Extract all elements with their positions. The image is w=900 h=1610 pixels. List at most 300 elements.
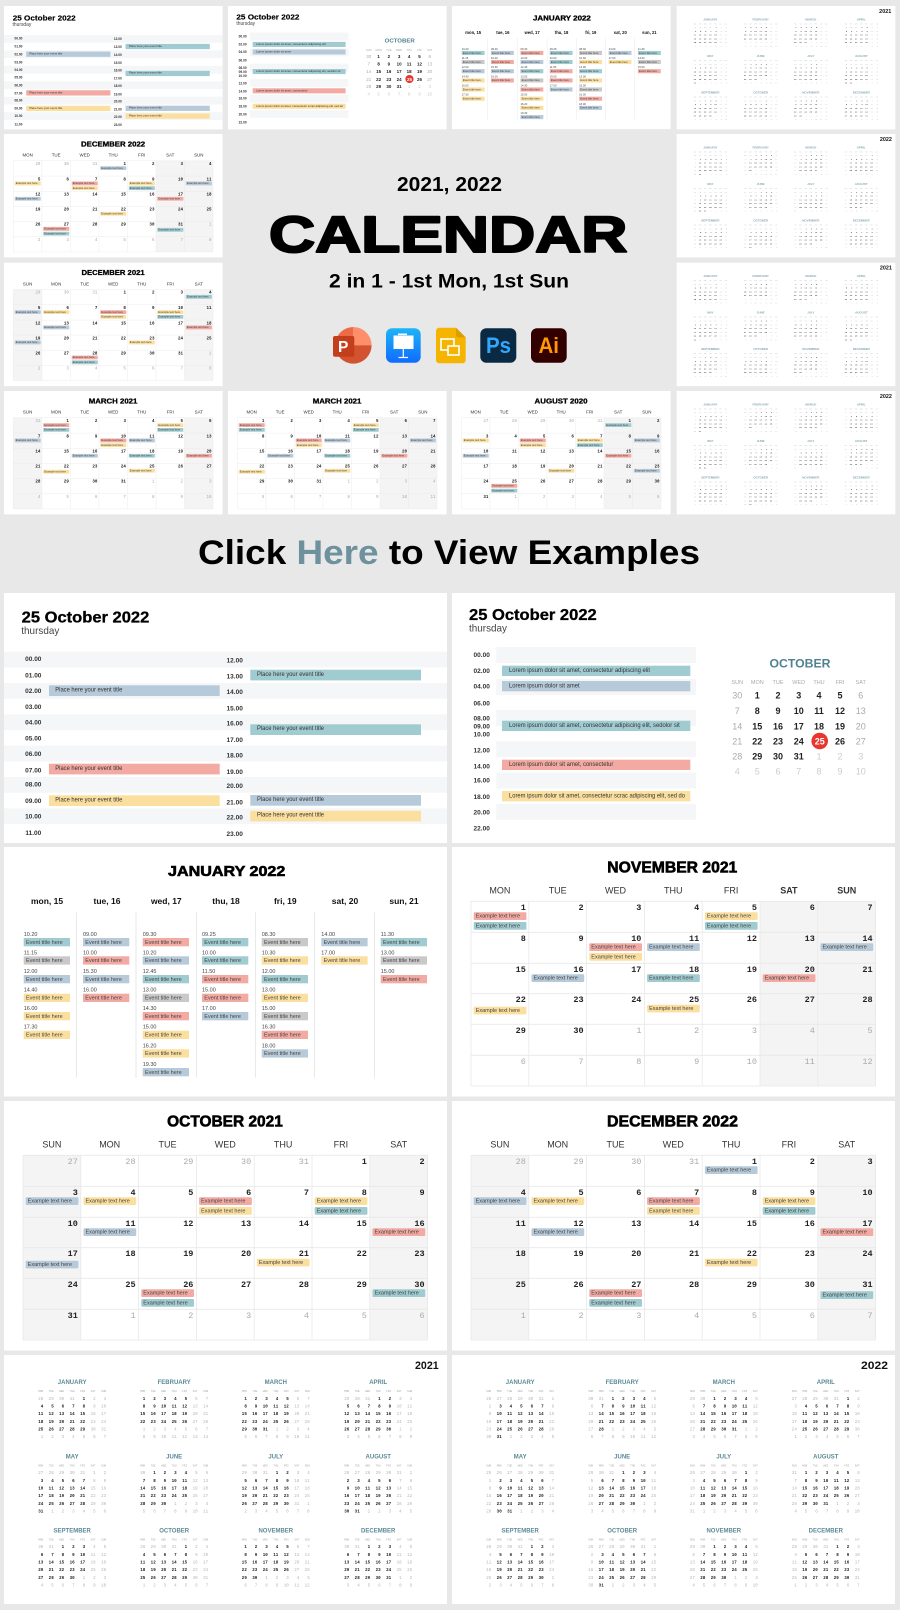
column: monday: Event title here <box>26 977 63 983</box>
month: February: FEBRUARY <box>158 1380 191 1386</box>
thumbnail: December 2022 month, Monday first: SAT <box>166 153 175 158</box>
event bars: Lorem ipsum dolor sit amet, consectetur adipiscing elit <box>509 668 650 674</box>
mini calendar: 8 <box>816 767 822 777</box>
mini calendar: 9 <box>775 706 781 716</box>
thumbnail: March 2021 month, Monday first: Example text here <box>268 453 291 457</box>
events: Example text here <box>143 1300 188 1306</box>
mini calendar: MON <box>751 680 764 686</box>
thumbnail: year 2021: 2021 <box>879 9 891 15</box>
month: September: 2 3 4 5 6 7 8 <box>486 1584 555 1588</box>
column: wednesday: 13.00 <box>143 988 156 994</box>
thumbnail: December 2021 month: Example text here <box>158 310 181 314</box>
event bars: Place here your event title <box>55 766 123 772</box>
month: June: 7 8 9 10 11 12 13 <box>140 1480 209 1484</box>
mini calendar: 4 <box>816 691 822 701</box>
event bars: Lorem ipsum dolor sit amet, consectetur scrac adipiscing elit, sed do <box>509 794 686 800</box>
thumbnail: December 2022 month, Monday first: FRI <box>138 153 145 158</box>
events: Example text here <box>476 914 520 920</box>
weekday headings: mon, 15 <box>31 896 63 906</box>
mini calendar: 21 <box>732 737 742 747</box>
weekday: thursday <box>469 623 508 635</box>
month: September: 13 14 15 16 17 18 19 <box>38 1561 107 1565</box>
month: May: 8 9 10 11 12 13 14 <box>486 1487 555 1491</box>
weekday headings: sun, 21 <box>389 896 419 906</box>
thumbnail: March 2021 month, Sunday first <box>4 391 223 514</box>
year label: 2022 <box>861 1360 888 1372</box>
month: June: JUNE <box>614 1454 630 1460</box>
column: friday: Event title here <box>264 1032 301 1038</box>
title: DECEMBER 2022 <box>607 1114 738 1131</box>
weekday headings: WED <box>605 886 626 896</box>
events: Example text here <box>649 1006 693 1012</box>
weekday headings: MON <box>99 1139 120 1149</box>
month: July: 17 18 19 20 21 22 23 <box>690 1495 758 1499</box>
day numbers: 1 2 3 4 5 6 7 <box>516 903 873 913</box>
month: August: 26 27 28 29 30 31 1 <box>344 1472 413 1476</box>
thumbnail: March 2021 month, Monday first: MON <box>246 410 257 415</box>
month: May: 27 28 29 30 31 1 2 <box>38 1472 107 1476</box>
thumbnail: March 2021 month, Sunday first: MARCH 2021 <box>89 397 138 406</box>
month: November: 20 21 22 23 24 25 26 <box>690 1569 758 1573</box>
month: October: 4 5 6 7 8 9 10 <box>140 1554 209 1558</box>
month: November: SUN MON TUE WED THU FRI SAT <box>690 1539 758 1542</box>
events: Example text here <box>591 1291 636 1297</box>
column: tuesday: Event title here <box>85 996 122 1002</box>
panel: November 2021 month <box>452 847 895 1096</box>
column: monday <box>24 932 70 1039</box>
mini calendar: 10 <box>856 767 866 777</box>
thumbnail: December 2021 month: SAT <box>195 281 203 286</box>
thumbnail: August 2020 month: FRI <box>586 410 593 415</box>
month: July: JULY <box>268 1454 283 1460</box>
month: June: 3 4 5 6 7 8 9 <box>588 1510 657 1514</box>
thumbnail: March 2021 month, Monday first <box>228 391 447 514</box>
column: thursday: Event title here <box>204 958 241 964</box>
events: Example text here <box>765 976 809 982</box>
panel: daily schedule full day <box>4 593 447 843</box>
events: Example text here <box>591 954 636 960</box>
thumbnail: December 2021 month: Example text here <box>16 310 38 314</box>
mini calendar: TUE <box>772 680 784 686</box>
events: Example text here <box>591 1300 636 1306</box>
event bars: Place here your event title <box>257 726 325 732</box>
thumbnail: August 2020 month: 31 1 2 3 4 5 6 <box>483 496 660 500</box>
month: February: 15 16 17 18 19 20 21 <box>140 1413 209 1417</box>
month: July: 10 11 12 13 14 15 16 <box>690 1487 758 1491</box>
month: April: 1 2 3 4 5 6 7 <box>792 1436 860 1440</box>
month: May: 1 2 3 4 5 6 7 <box>486 1480 555 1484</box>
events: Example text here <box>707 1168 751 1174</box>
thumbnail: August 2020 month <box>452 391 671 514</box>
column: saturday: 17.00 <box>321 950 335 956</box>
mini calendar: 19 <box>835 721 845 731</box>
mini calendar: 5 <box>837 691 843 701</box>
mini calendar: 22 <box>752 737 762 747</box>
thumbnail: December 2022 month, Monday first: Example text here <box>16 181 38 185</box>
thumbnail: March 2021 month, Monday first: Example text here <box>411 438 433 442</box>
icon: PowerPoint <box>333 327 372 364</box>
month: October: 1 2 3 4 5 6 7 <box>140 1584 209 1588</box>
thumbnail: March 2021 month, Monday first: Example text here <box>354 428 376 432</box>
month: April: 12 13 14 15 16 17 18 <box>344 1413 413 1417</box>
month: February: SUN MON TUE WED THU FRI SAT <box>588 1390 657 1393</box>
day numbers: 22 23 24 25 26 27 28 <box>516 995 873 1005</box>
month: December: 13 14 15 16 17 18 19 <box>344 1561 413 1565</box>
thumbnail: March 2021 month, Sunday first: Example text here <box>101 438 124 442</box>
day numbers: 24 25 26 27 28 29 30 <box>68 1280 425 1290</box>
month: August: 2 3 4 5 6 7 8 <box>344 1480 413 1484</box>
column: monday: 17.30 <box>24 1025 37 1031</box>
mini calendar: 2 <box>837 751 843 761</box>
month: April: 29 30 31 1 2 3 4 <box>344 1398 413 1402</box>
month: September: 28 29 30 31 1 2 3 <box>486 1546 555 1550</box>
thumbnail: August 2020 month: Example text here <box>492 484 515 488</box>
weekday headings: thu, 18 <box>212 896 240 906</box>
events: Example text here <box>765 1208 809 1214</box>
column: monday: 10.20 <box>24 932 37 938</box>
thumbnail: March 2021 month, Sunday first: Example text here <box>158 428 181 432</box>
weekday headings: FRI <box>334 1139 348 1149</box>
events: Example text here <box>591 945 636 951</box>
mini calendar: 23 <box>773 737 783 747</box>
month: September: SEPTEMBER <box>54 1528 92 1534</box>
thumbnail: August 2020 month: WED <box>528 410 538 415</box>
month: March: 13 14 15 16 17 18 19 <box>690 1413 758 1417</box>
mini calendar: 26 <box>835 737 845 747</box>
weekday headings: SAT <box>838 1139 856 1149</box>
mini calendar: 5 <box>755 767 760 777</box>
month: May: 29 30 31 1 2 3 4 <box>486 1510 555 1514</box>
column: thursday: Event title here <box>204 1014 241 1020</box>
thumbnail: August 2020 month: Example text here <box>521 438 543 442</box>
month: October: 9 10 11 12 13 14 15 <box>588 1561 657 1565</box>
weekday headings: SAT <box>780 886 798 896</box>
month: April: 26 27 28 29 30 1 2 <box>344 1428 413 1432</box>
thumbnail: December 2022 month, Monday first: 19 20 21 22 23 24 25 <box>35 209 212 213</box>
afternoon hours: 15.00 <box>227 705 243 712</box>
thumbnail: year 2021 <box>677 6 895 129</box>
month: June <box>140 1454 209 1514</box>
hours: 16.00 <box>474 778 490 785</box>
thumbnail: March 2021 month, Monday first: 5 6 7 8 9 10 11 <box>259 496 436 500</box>
month: July: SUN MON TUE WED THU FRI SAT <box>690 1464 758 1467</box>
thumbnail: December 2021 month: TUE <box>80 281 89 286</box>
month: December: 25 26 27 28 29 30 31 <box>792 1577 860 1581</box>
month: November: 1 2 3 4 5 6 7 <box>242 1546 310 1550</box>
mini calendar: THU <box>813 680 825 686</box>
weekday headings: SUN <box>42 1139 61 1149</box>
thumbnail: March 2021 month, Monday first: Example text here <box>382 453 405 457</box>
events: Example text here <box>374 1291 419 1297</box>
month: December: 1 2 3 4 5 6 7 <box>792 1584 860 1588</box>
morning hours: 09.00 <box>25 798 42 805</box>
column: sunday: Event title here <box>383 977 420 983</box>
month: December: MON TUE WED THU FRI SAT SUN <box>344 1539 413 1542</box>
thumbnail: August 2020 month: 17 18 19 20 21 22 23 <box>483 466 660 470</box>
month: August: 21 22 23 24 25 26 27 <box>792 1495 860 1499</box>
month: February: 6 7 8 9 10 11 12 <box>588 1436 657 1440</box>
thumbnail: year 2021 second layout: 2021 <box>880 266 892 272</box>
month: November: 29 30 1 2 3 4 5 <box>690 1546 758 1550</box>
hours: 06.00 <box>474 700 490 707</box>
month: October: 26 27 28 29 30 31 1 <box>588 1546 657 1550</box>
month: December: SUN MON TUE WED THU FRI SAT <box>792 1539 860 1542</box>
mini calendar: 17 <box>794 721 804 731</box>
mini calendar: 4 <box>735 767 740 777</box>
month: August <box>792 1454 860 1514</box>
month: October <box>140 1528 209 1588</box>
months grid <box>486 1380 860 1588</box>
column: tuesday: Event title here <box>85 940 122 946</box>
thumbnail: December 2022 month, Monday first: MON <box>22 153 33 158</box>
month: July: MON TUE WED THU FRI SAT SUN <box>242 1464 310 1467</box>
day numbers: 15 16 17 18 19 20 21 <box>516 965 873 975</box>
month: December: DECEMBER <box>361 1528 396 1534</box>
thumbnail: December 2022 month, Monday first: Example text here <box>16 196 38 200</box>
events <box>474 1166 873 1307</box>
column: wednesday: 09.30 <box>143 932 156 938</box>
events: Example text here <box>86 1230 130 1236</box>
hours: 14.00 <box>474 763 490 770</box>
mini calendar: 9 <box>837 767 843 777</box>
thumbnail: December 2022 month, Monday first: 5 6 7 8 9 10 11 <box>35 178 212 182</box>
thumbnail: December 2022 month, Monday first: Example text here <box>158 228 181 232</box>
panel: year 2021 <box>4 1355 447 1604</box>
month: December: 3 4 5 6 7 8 9 <box>344 1584 413 1588</box>
mini calendar: SAT <box>856 680 866 686</box>
thumbnail: August 2020 month: Example text here <box>578 438 600 442</box>
hours: 02.00 <box>474 668 490 675</box>
day numbers: 27 28 29 30 31 1 2 <box>68 1157 425 1167</box>
thumbnail: March 2021 month, Monday first: THU <box>333 410 342 415</box>
hours: 12.00 <box>474 747 490 754</box>
month: October: 18 19 20 21 22 23 24 <box>140 1569 209 1573</box>
column: sunday <box>381 932 427 983</box>
month: October: 2 3 4 5 6 7 8 <box>588 1554 657 1558</box>
events: Example text here <box>534 976 578 982</box>
month: August: 4 5 6 7 8 9 10 <box>792 1510 860 1514</box>
mini calendar: 24 <box>794 737 804 747</box>
column: tuesday: Event title here <box>85 958 122 964</box>
thumbnail: December 2021 month: MON <box>51 281 61 286</box>
weekday headings: MON <box>489 886 510 896</box>
weekday headings: MON <box>547 1139 568 1149</box>
column: saturday: 14.00 <box>321 932 335 938</box>
month: July <box>242 1454 310 1514</box>
month: August: 28 29 30 31 1 2 3 <box>792 1503 860 1507</box>
heading: years: 2021, 2022 <box>397 174 502 196</box>
month: October: 28 29 30 31 1 2 3 <box>140 1546 209 1550</box>
day numbers: 25 26 27 28 29 30 31 <box>516 1280 873 1290</box>
icon: Keynote <box>386 328 421 363</box>
column: friday: 16.30 <box>262 1025 275 1031</box>
column: monday: Event title here <box>26 958 63 964</box>
thumbnail: December 2022 month, Monday first: 12 13 14 15 16 17 18 <box>35 194 212 198</box>
month: August: 9 10 11 12 13 14 15 <box>344 1487 413 1491</box>
thumbnail: December 2021 month: Example text here <box>158 315 181 319</box>
mini calendar: 30 <box>773 751 783 761</box>
mini calendar: FRI <box>836 680 845 686</box>
month: January <box>486 1380 555 1440</box>
afternoon hours: 22.00 <box>227 815 243 822</box>
month: August: MON TUE WED THU FRI SAT SUN <box>344 1464 413 1467</box>
month: June: 28 29 30 1 2 3 4 <box>140 1503 209 1507</box>
morning hours: 00.00 <box>25 656 42 663</box>
thumbnail: August 2020 month: SUN <box>642 410 651 415</box>
month: December: DECEMBER <box>809 1528 844 1534</box>
month: January: 26 27 28 29 30 31 1 <box>486 1398 555 1402</box>
column: sunday: Event title here <box>383 958 420 964</box>
thumbnail: August 2020 month: Example text here <box>635 438 657 442</box>
weekday headings: tue, 16 <box>94 896 121 906</box>
column: wednesday: Event title here <box>145 1051 182 1057</box>
month: August: 14 15 16 17 18 19 20 <box>792 1487 860 1491</box>
month: January: SUN MON TUE WED THU FRI SAT <box>486 1390 555 1393</box>
month: January: JANUARY <box>506 1380 535 1386</box>
month: June: SUN MON TUE WED THU FRI SAT <box>588 1464 657 1467</box>
thumbnail: December 2022 month, Monday first: Example text here <box>101 211 124 215</box>
month: February: 8 9 10 11 12 13 14 <box>140 1436 209 1440</box>
month: November <box>690 1528 758 1588</box>
month: March: SUN MON TUE WED THU FRI SAT <box>690 1390 758 1393</box>
month: May: 17 18 19 20 21 22 23 <box>38 1495 107 1499</box>
day numbers <box>516 903 873 1067</box>
month: December: 4 5 6 7 8 9 10 <box>792 1554 860 1558</box>
column: wednesday: 15.00 <box>143 1025 156 1031</box>
column: wednesday: Event title here <box>145 996 182 1002</box>
month: July: 5 6 7 8 9 10 11 <box>242 1480 310 1484</box>
month: May: MON TUE WED THU FRI SAT SUN <box>38 1464 107 1467</box>
thumbnail: year 2022 second layout: 2022 <box>880 394 892 400</box>
month: March: 22 23 24 25 26 27 28 <box>242 1421 310 1425</box>
weekday headings: FRI <box>724 886 738 896</box>
day numbers: 4 5 6 7 8 9 10 <box>516 1188 873 1198</box>
events: Example text here <box>649 976 693 982</box>
weekday headings: TUE <box>158 1139 176 1149</box>
weekday headings: TUE <box>606 1139 624 1149</box>
thumbnail: daily schedule <box>4 6 223 129</box>
month: February: FEBRUARY <box>606 1380 639 1386</box>
thumbnail: August 2020 month: Example text here <box>606 423 629 427</box>
mini calendar: 3 <box>858 751 863 761</box>
thumbnail: December 2021 month: Example text here <box>187 295 209 299</box>
month: July: JULY <box>716 1454 731 1460</box>
thumbnail: December 2022 month, Monday first: 29 30 31 1 2 3 4 <box>35 163 212 167</box>
hours: 00.00 <box>474 652 490 659</box>
month: December <box>792 1528 860 1588</box>
column: wednesday: 12.45 <box>143 969 156 975</box>
month: October: OCTOBER <box>607 1528 638 1534</box>
month: March: MARCH <box>265 1380 287 1386</box>
mini calendar: 12 <box>835 706 845 716</box>
thumbnail: March 2021 month, Monday first: 8 9 10 11 12 13 14 <box>259 435 436 439</box>
thumbnail: December 2021 month: WED <box>108 281 118 286</box>
month: January: 1 2 3 4 5 6 7 <box>38 1436 107 1440</box>
month: November: 29 30 1 2 3 4 5 <box>242 1577 310 1581</box>
thumbnail: December 2021 month: THU <box>137 281 146 286</box>
panel: weekly agenda January 2022 <box>4 847 447 1096</box>
month: November: 4 5 6 7 8 9 10 <box>690 1584 758 1588</box>
month: July: 29 30 31 1 2 3 4 <box>242 1472 310 1476</box>
month: September: 30 31 1 2 3 4 5 <box>38 1546 107 1550</box>
mini calendar: SUN <box>731 680 743 686</box>
thumbnail: December 2021 month: Example text here <box>130 340 152 344</box>
thumbnail: December 2022 month, Monday first: 2 3 4 5 6 7 8 <box>35 239 212 243</box>
column: friday: 10.30 <box>262 950 275 956</box>
thumbnail: August 2020 month: AUGUST 2020 <box>535 397 588 406</box>
column: wednesday: Event title here <box>145 940 182 946</box>
afternoon hours: 21.00 <box>227 799 243 806</box>
month: January: MON TUE WED THU FRI SAT SUN <box>38 1390 107 1393</box>
thumbnail: March 2021 month, Sunday first: 4 5 6 7 8 9 10 <box>35 496 212 500</box>
mini calendar: 25 <box>815 737 825 747</box>
thumbnail: December 2022 month, Monday first: Example text here <box>158 196 181 200</box>
month: May: 24 25 26 27 28 29 30 <box>38 1503 107 1507</box>
month: June <box>588 1454 657 1514</box>
column: tuesday: 15.30 <box>83 969 97 975</box>
month: March <box>690 1380 758 1440</box>
hours: 09.00 <box>474 724 490 731</box>
column: wednesday: Event title here <box>145 958 182 964</box>
month: September: MON TUE WED THU FRI SAT SUN <box>38 1539 107 1542</box>
day numbers: 17 18 19 20 21 22 23 <box>68 1249 425 1259</box>
month: August: 16 17 18 19 20 21 22 <box>344 1495 413 1499</box>
mini calendar: 28 <box>732 751 742 761</box>
month: August: SUN MON TUE WED THU FRI SAT <box>792 1464 860 1467</box>
events: Example text here <box>476 1008 520 1014</box>
column: thursday: 15.00 <box>202 988 216 994</box>
month: July: 3 4 5 6 7 8 9 <box>690 1480 758 1484</box>
month: July: 12 13 14 15 16 17 18 <box>242 1487 310 1491</box>
month: April: 5 6 7 8 9 10 11 <box>344 1405 413 1409</box>
morning hours: 07.00 <box>25 767 42 774</box>
mini calendar: 11 <box>814 706 824 716</box>
month: February: 1 2 3 4 5 6 7 <box>140 1428 209 1432</box>
column: wednesday: Event title here <box>145 1014 182 1020</box>
mini calendar: WED <box>792 680 805 686</box>
month: May: 15 16 17 18 19 20 21 <box>486 1495 555 1499</box>
month: April: APRIL <box>817 1380 835 1386</box>
column: thursday: 11.50 <box>202 969 215 975</box>
thumbnail: August 2020 month: THU <box>557 410 566 415</box>
column: saturday <box>321 932 368 965</box>
month: December: 28 29 30 31 1 2 3 <box>792 1546 860 1550</box>
mini calendar: 7 <box>796 767 801 777</box>
weekday headings: SUN <box>490 1139 509 1149</box>
month: April: SUN MON TUE WED THU FRI SAT <box>792 1390 860 1393</box>
events <box>474 912 873 1014</box>
event bars: Place here your event title <box>55 688 123 694</box>
thumbnail: December 2021 month: Example text here <box>16 340 38 344</box>
month: July: 26 27 28 29 30 31 1 <box>242 1503 310 1507</box>
title: JANUARY 2022 <box>168 864 285 880</box>
month: October: 30 31 1 2 3 4 5 <box>588 1584 657 1588</box>
thumbnail: weekly agenda <box>452 6 671 129</box>
event bars: Lorem ipsum dolor sit amet <box>509 684 580 690</box>
thumbnail: December 2021 month: 19 20 21 22 23 24 25 <box>35 337 212 341</box>
thumbnail: August 2020 month: Example text here <box>549 468 572 472</box>
months grid <box>38 1380 413 1588</box>
month: April: APRIL <box>369 1380 388 1386</box>
month: August <box>344 1454 413 1514</box>
month: May: 10 11 12 13 14 15 16 <box>38 1487 107 1491</box>
mini calendar: 3 <box>796 691 801 701</box>
month: January: 23 24 25 26 27 28 29 <box>486 1428 555 1432</box>
thumbnail: March 2021 month, Sunday first: 14 15 16 17 18 19 20 <box>35 451 212 455</box>
hours: 22.00 <box>474 826 490 833</box>
events <box>26 1197 425 1307</box>
month: December <box>344 1528 413 1588</box>
